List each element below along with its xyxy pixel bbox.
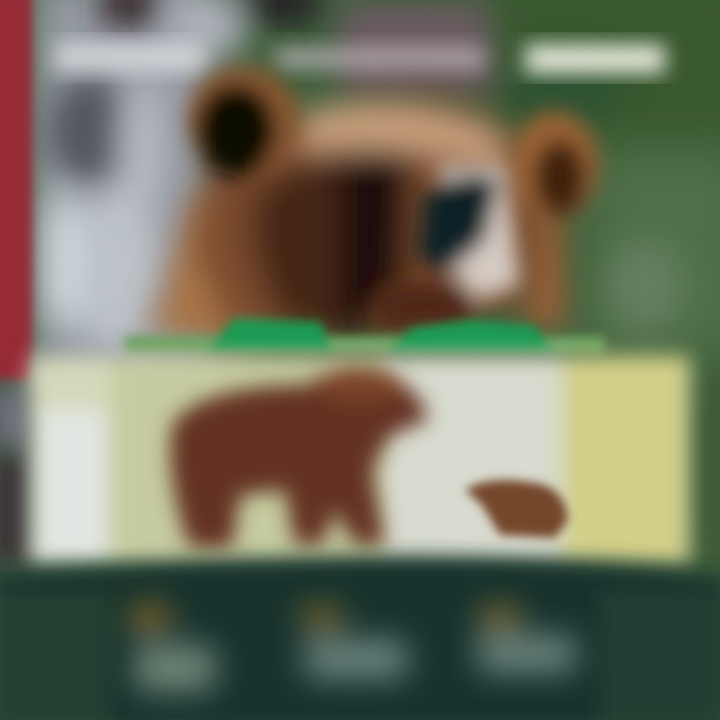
icon: stat 2 [298,605,346,631]
adult bear silhouette [170,367,428,548]
bottom band [0,558,720,720]
red strip [0,0,32,380]
heading blobs [55,42,665,74]
left ear [187,66,299,176]
bear neck and shoulders [150,195,565,345]
muzzle and nose [375,165,520,330]
stat column 1 [126,604,215,691]
panel: lower chart area [30,356,690,564]
bear head [150,66,599,345]
stat 1 text blob [135,645,215,691]
stat column 2 [298,605,407,678]
stat column 3 [476,605,576,672]
icon: stat 3 [476,605,524,631]
dark side pillar [0,390,30,560]
stat 3 text blob [478,636,576,672]
icon: stat 1 [126,604,174,632]
green band [125,318,605,354]
head shape [195,95,545,340]
stat 2 text blob [305,640,407,678]
right ear [511,111,599,219]
cub silhouette [465,480,568,538]
